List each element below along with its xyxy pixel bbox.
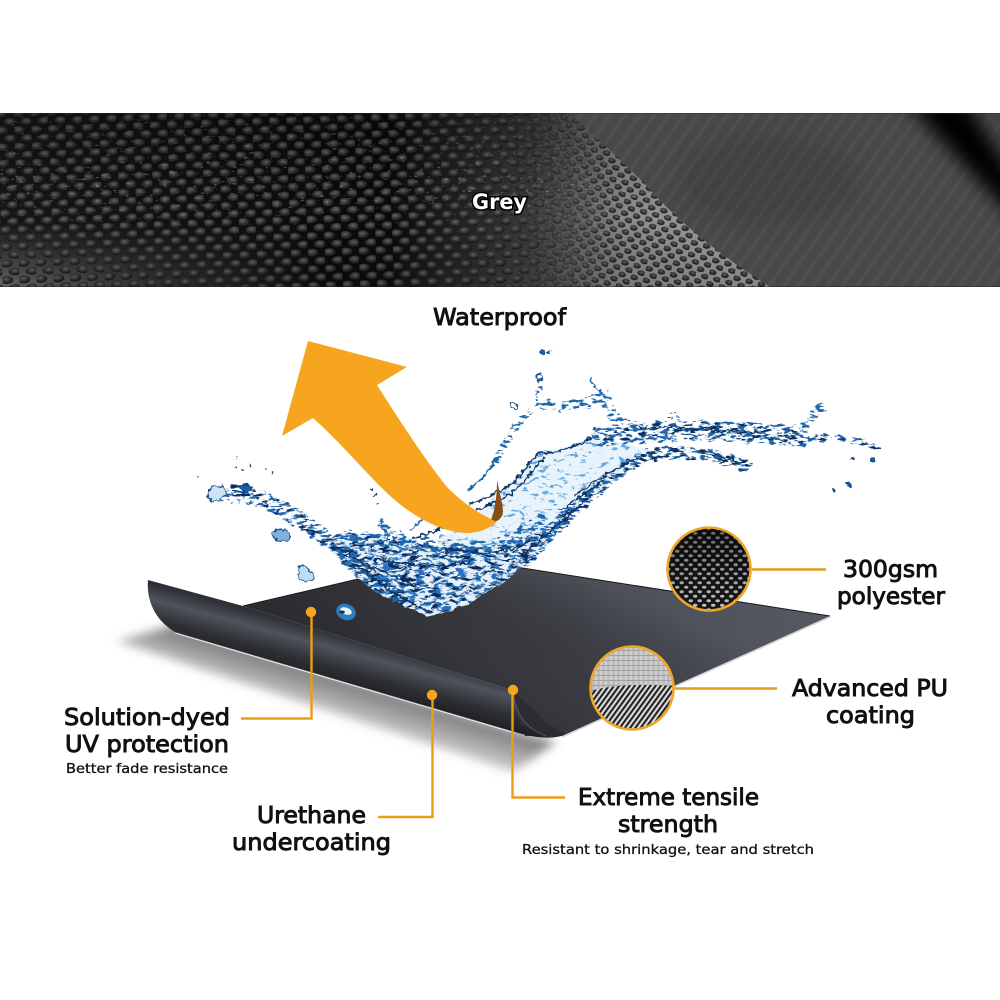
label: Extreme tensile strength: strength: [618, 812, 718, 838]
label: Advanced PU coating: Advanced PU: [792, 676, 948, 702]
callout: Advanced PU coating: [588, 645, 948, 732]
callout: Urethane undercoating: [232, 690, 437, 856]
leader line and dot: [508, 685, 565, 798]
heading: Waterproof: Waterproof: [433, 305, 567, 331]
label: 300gsm polyester: polyester: [837, 584, 946, 610]
label: Extreme tensile strength: Extreme tensile: [578, 785, 759, 811]
label: Solution-dyed UV protection: [64, 705, 230, 777]
leader line and dot: [378, 690, 437, 817]
label: Solution-dyed UV protection: Solution-dyed: [64, 705, 230, 731]
label: Urethane undercoating: undercoating: [232, 830, 391, 856]
fabric swatch circle: polyester: [665, 525, 755, 615]
splash lacy stream bands: [225, 378, 877, 598]
sheet cast shadow: [116, 625, 556, 772]
label: 300gsm polyester: 300gsm: [843, 557, 938, 583]
label: Solution-dyed UV protection: UV protection: [65, 732, 229, 758]
label: Advanced PU coating: [792, 676, 948, 729]
curled sheet edge: [148, 580, 566, 738]
leader line and dot: [241, 607, 316, 718]
orange arrow: [282, 341, 497, 533]
label: Solution-dyed UV protection: Better fade resistance: [66, 761, 228, 777]
callout: 300gsm polyester: [665, 525, 946, 615]
tarp sheet illustration: [116, 557, 830, 772]
label: Extreme tensile strength: [522, 785, 814, 858]
callout: Solution-dyed UV protection: [64, 607, 316, 777]
water splash: [197, 351, 877, 620]
banner label: Grey: Grey: [472, 190, 527, 214]
splash light body: [439, 436, 650, 547]
splash dense lower basin: [330, 503, 575, 617]
label: Urethane undercoating: Urethane: [257, 803, 366, 829]
brown arrow fold: [491, 480, 503, 522]
label: Extreme tensile strength: Resistant to shrinkage, tear and stretch: [522, 842, 814, 858]
fabric banner photo: [0, 100, 1000, 288]
label: Urethane undercoating: [232, 803, 391, 856]
flat sheet surface: [243, 557, 830, 736]
splash dark lace accents: [235, 431, 877, 598]
fabric swatch circle: PU coating: [588, 645, 678, 732]
label: Advanced PU coating: coating: [826, 703, 915, 729]
label: 300gsm polyester: [837, 557, 946, 610]
callout: Extreme tensile strength: [508, 685, 814, 858]
splash thin strokes and droplets: [197, 351, 874, 612]
water drop on sheet: [334, 601, 358, 623]
